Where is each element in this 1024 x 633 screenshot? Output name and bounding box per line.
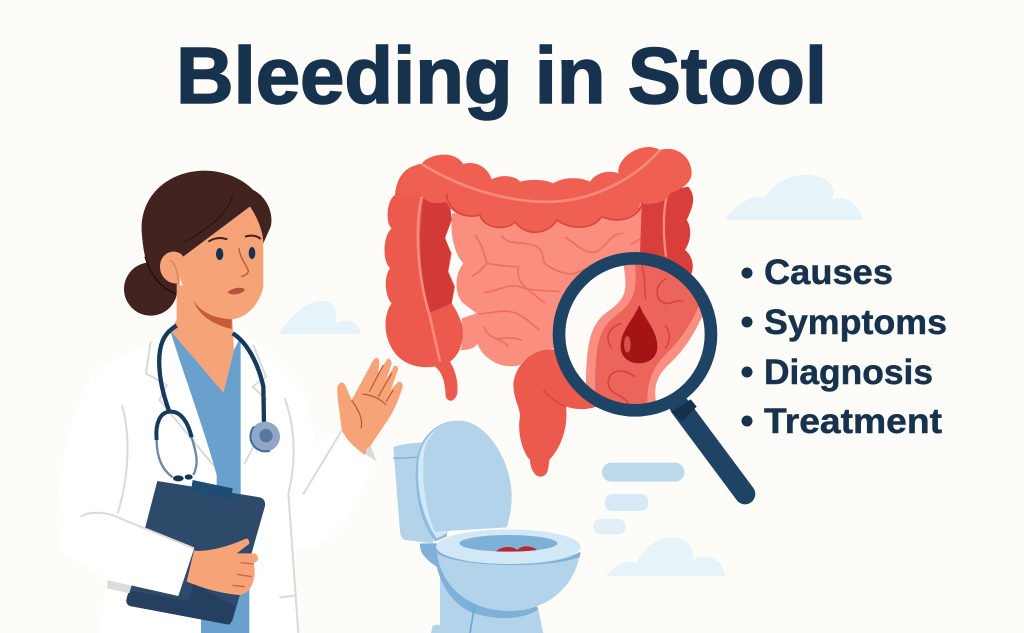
coat seams [118, 342, 342, 633]
cloud: bottom right [607, 537, 725, 576]
white coat [58, 330, 377, 633]
bullet list [742, 253, 947, 441]
title: Bleeding in Stool [176, 31, 827, 120]
ascending colon [385, 165, 463, 401]
descending colon stripe [664, 197, 667, 257]
small intestine [451, 207, 643, 366]
magnified tissue [586, 263, 707, 407]
clipboard [126, 480, 265, 625]
bowl [437, 548, 580, 611]
gray coat underside [107, 578, 132, 593]
stethoscope [156, 326, 280, 481]
chin shadow [193, 300, 232, 329]
ascending colon stripe [418, 197, 440, 362]
illustration: doctor [58, 171, 403, 633]
lower hand [187, 538, 258, 595]
transverse colon [400, 147, 692, 232]
base and pedestal [420, 543, 543, 633]
neck and face [160, 207, 263, 392]
sleeve seam [81, 513, 194, 548]
transverse colon stripe [422, 150, 660, 202]
infographic canvas [80, 44, 946, 633]
blood drop [621, 305, 657, 363]
sleeve [60, 512, 194, 596]
item: symptoms: Symptoms [764, 303, 947, 342]
raised hand [337, 358, 403, 462]
blood in bowl [496, 546, 538, 552]
item: treatment: Treatment [764, 402, 942, 441]
cloud: beside doctor [278, 301, 360, 334]
seat [436, 529, 581, 565]
facial features [170, 196, 261, 294]
scrubs [170, 330, 249, 633]
bun and hair [124, 171, 271, 316]
illustration: intestines [385, 147, 693, 477]
illustration: magnifying glass [559, 258, 745, 494]
tank [393, 442, 433, 543]
lens background [565, 264, 705, 404]
cloud: top right [725, 175, 863, 220]
lid [416, 421, 512, 542]
ascending colon shadow [420, 198, 454, 313]
illustration: toilet [393, 421, 581, 633]
small intestine folds [472, 233, 642, 347]
lens ring [559, 258, 711, 410]
transverse colon creases [447, 193, 642, 232]
item: causes: Causes [764, 253, 893, 292]
decorative speed pills [593, 463, 684, 534]
sigmoid crease [543, 390, 566, 407]
descending colon [640, 187, 693, 277]
handle [672, 399, 745, 494]
item: diagnosis: Diagnosis [764, 353, 933, 392]
sigmoid colon [513, 349, 597, 477]
